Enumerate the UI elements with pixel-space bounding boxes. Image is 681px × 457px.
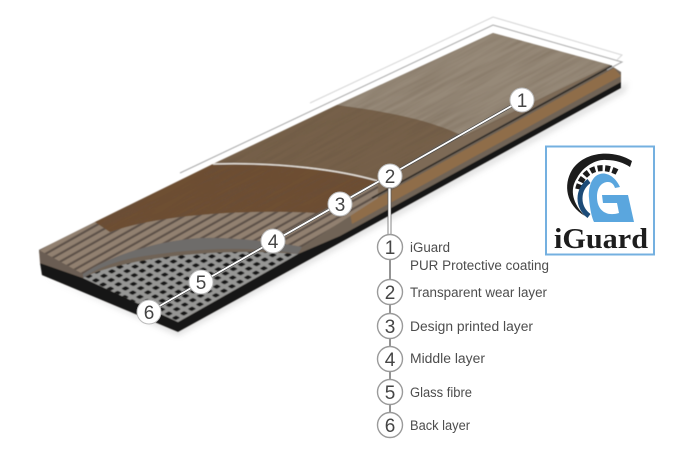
left end face xyxy=(39,250,83,278)
marker 3: 3 xyxy=(335,195,345,216)
ground shadow xyxy=(44,82,628,336)
leader line across plank xyxy=(149,100,522,312)
edge between line and plank edge xyxy=(378,65,610,194)
marker 3 xyxy=(328,192,352,216)
plank base xyxy=(39,33,621,332)
legend item 5: 5 xyxy=(385,383,395,404)
legend item 6: 6 xyxy=(385,416,395,437)
legend item 2: 2 xyxy=(385,283,395,304)
legend item 3: 3 xyxy=(385,317,395,338)
legend item 2 xyxy=(378,280,547,304)
marker 2 xyxy=(378,164,402,188)
marker 5 xyxy=(189,270,213,294)
legend item 3: Design printed layer xyxy=(410,319,534,334)
marker 2: 2 xyxy=(385,167,395,188)
legend item 1: PUR Protective coating xyxy=(410,258,549,273)
marker 5: 5 xyxy=(196,273,206,294)
design printed layer xyxy=(95,164,378,232)
glass fibre grid xyxy=(83,252,298,322)
glass sheets xyxy=(310,17,622,103)
legend item 1 xyxy=(378,234,549,273)
marker 1 xyxy=(510,88,534,112)
legend item 1: 1 xyxy=(385,238,395,259)
white curved edge xyxy=(213,164,378,181)
legend item 5 xyxy=(378,380,472,404)
middle layer textured top xyxy=(39,181,378,274)
icon: crest segments xyxy=(578,168,617,190)
legend vertical connector xyxy=(388,188,391,420)
legend item 4 xyxy=(378,346,486,372)
iGuard logo xyxy=(546,146,654,255)
icon: helmet crest xyxy=(567,154,632,216)
marker 4 xyxy=(261,229,285,253)
marker 6 xyxy=(137,300,161,324)
marker 1: 1 xyxy=(517,91,527,112)
legend item 5: Glass fibre xyxy=(410,385,472,400)
floor plank cross-section xyxy=(38,16,628,336)
marker 6: 6 xyxy=(144,303,154,324)
top edge dark line xyxy=(372,66,612,198)
legend item 3 xyxy=(378,314,534,338)
wood grain texture xyxy=(340,40,608,130)
plank marker circles xyxy=(137,88,534,324)
legend item 4: 4 xyxy=(385,350,396,371)
legend item 6: Back layer xyxy=(410,418,470,433)
marker 4: 4 xyxy=(268,232,279,253)
legend item 6 xyxy=(378,412,470,438)
middle layer gray band xyxy=(83,238,302,278)
legend item 1: iGuard xyxy=(410,240,450,255)
icon: inner dark blue arc xyxy=(580,181,589,216)
legend item 4: Middle layer xyxy=(410,351,486,366)
icon: blue G xyxy=(589,174,634,222)
iGuard PUR coating layer xyxy=(337,33,610,136)
logo frame xyxy=(546,146,654,254)
back layer xyxy=(40,82,621,332)
plank side: wood strip xyxy=(350,68,621,224)
transparent wear layer xyxy=(213,105,463,181)
logo wordmark: iGuard xyxy=(554,223,648,255)
legend item 2: Transparent wear layer xyxy=(410,285,547,300)
legend xyxy=(378,188,549,438)
